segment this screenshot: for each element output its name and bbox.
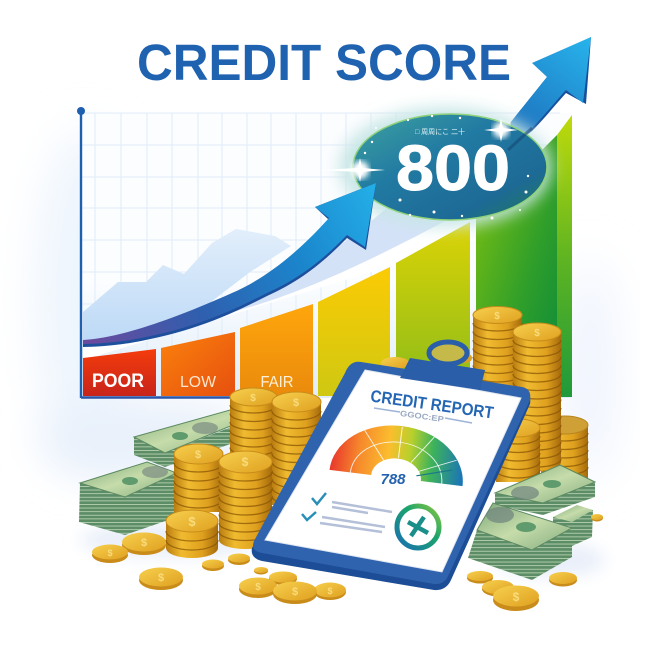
coin: $ — [141, 537, 147, 549]
coin — [228, 554, 250, 565]
label: poor: POOR — [92, 371, 144, 392]
ground shadow — [80, 522, 605, 578]
coin stack: back right — [272, 392, 321, 505]
clipboard ring — [429, 342, 467, 364]
cash piles left — [79, 410, 245, 535]
checkmark 1 — [312, 493, 326, 504]
report subheading: GGOC:EP — [400, 409, 445, 424]
cash: lower left — [79, 462, 177, 535]
coin: $ — [255, 582, 261, 593]
coin — [467, 571, 493, 584]
coin stack: middle — [174, 444, 223, 512]
report subheading — [374, 408, 472, 424]
cash: front — [468, 503, 572, 580]
sparkle: top right — [484, 118, 518, 142]
score number: 800 — [396, 132, 510, 204]
badge micro text: □ 周周にこ 二十 — [415, 127, 465, 136]
sparkle dots — [364, 115, 529, 220]
coin stack: right tall back — [473, 306, 522, 393]
coin stacks left — [166, 388, 321, 558]
bar: fair — [240, 304, 313, 396]
clipboard board — [252, 366, 530, 590]
gauge value: 788 — [380, 471, 406, 488]
coin: $ — [158, 572, 164, 584]
coin — [273, 582, 317, 604]
coin — [239, 578, 277, 598]
cash: upper — [495, 465, 595, 515]
chart baseline — [81, 396, 232, 399]
coin: $ — [327, 586, 333, 596]
coin — [122, 532, 166, 555]
background glow — [35, 130, 615, 480]
arrow seen through badge — [508, 128, 532, 150]
coin — [549, 572, 577, 586]
coin — [482, 580, 514, 596]
checklist lines — [320, 502, 392, 532]
coin — [92, 544, 128, 563]
bar chart: score bands — [83, 115, 572, 397]
clipboard clip — [400, 358, 485, 390]
bar: good — [318, 267, 390, 396]
clipboard paper — [265, 370, 521, 572]
loose coins — [92, 514, 603, 611]
label: fair: FAIR — [260, 374, 294, 391]
coin: $ — [292, 586, 298, 598]
coin: $ — [513, 590, 520, 604]
bar: top edge — [557, 115, 572, 397]
bar: low — [161, 332, 235, 396]
status ring icon — [397, 506, 439, 548]
score badge — [320, 114, 547, 220]
coin stack: front tall: $ — [242, 455, 249, 469]
checkmark 2 — [302, 512, 316, 520]
cash piles right — [468, 465, 595, 580]
clipboard — [252, 342, 530, 590]
coin stack: right tallest — [513, 323, 561, 471]
score gauge — [350, 421, 460, 485]
coin stack: back left — [230, 388, 277, 460]
coin stack: back left: $ — [250, 393, 256, 404]
coin stacks behind clipboard right — [381, 306, 588, 482]
upper arrow segment — [505, 37, 591, 153]
gauge needle — [416, 466, 452, 480]
coin — [591, 514, 603, 522]
coin — [269, 572, 297, 585]
coin stack: back right: $ — [293, 397, 299, 409]
coin stack: front short — [166, 510, 218, 558]
cash: back — [553, 505, 593, 546]
white band above bars — [83, 208, 476, 360]
light swoosh below arrow — [83, 195, 470, 347]
glow behind score — [339, 107, 551, 227]
coin stack: far right short — [541, 416, 588, 478]
coin stack: right tall back: $ — [494, 311, 500, 322]
coin stack: front short: $ — [188, 514, 196, 529]
sparkle: left — [320, 158, 385, 182]
coin — [202, 560, 224, 571]
vertical axis — [77, 107, 85, 398]
label: low: LOW — [180, 374, 217, 391]
coin stack: front tall — [219, 451, 272, 549]
chart backdrop mountains — [83, 229, 291, 344]
bar: excellent — [476, 135, 557, 396]
report heading: CREDIT REPORT — [369, 386, 495, 423]
main rising arrow — [83, 183, 376, 347]
panel: chart background and grid — [81, 113, 571, 398]
coin: $ — [107, 548, 113, 558]
bar: very good — [396, 222, 470, 396]
coin — [493, 586, 539, 611]
coin stack: middle: $ — [195, 449, 201, 461]
title: CREDIT SCORE — [137, 34, 511, 91]
coin — [254, 567, 268, 574]
coins peeking behind clip — [381, 353, 472, 369]
bar: poor — [83, 349, 156, 396]
coin — [139, 568, 183, 590]
coin stack: right tallest: $ — [534, 328, 540, 339]
coin — [314, 582, 346, 600]
coin stack: right short front — [496, 419, 540, 482]
cash: upper left — [134, 410, 245, 467]
